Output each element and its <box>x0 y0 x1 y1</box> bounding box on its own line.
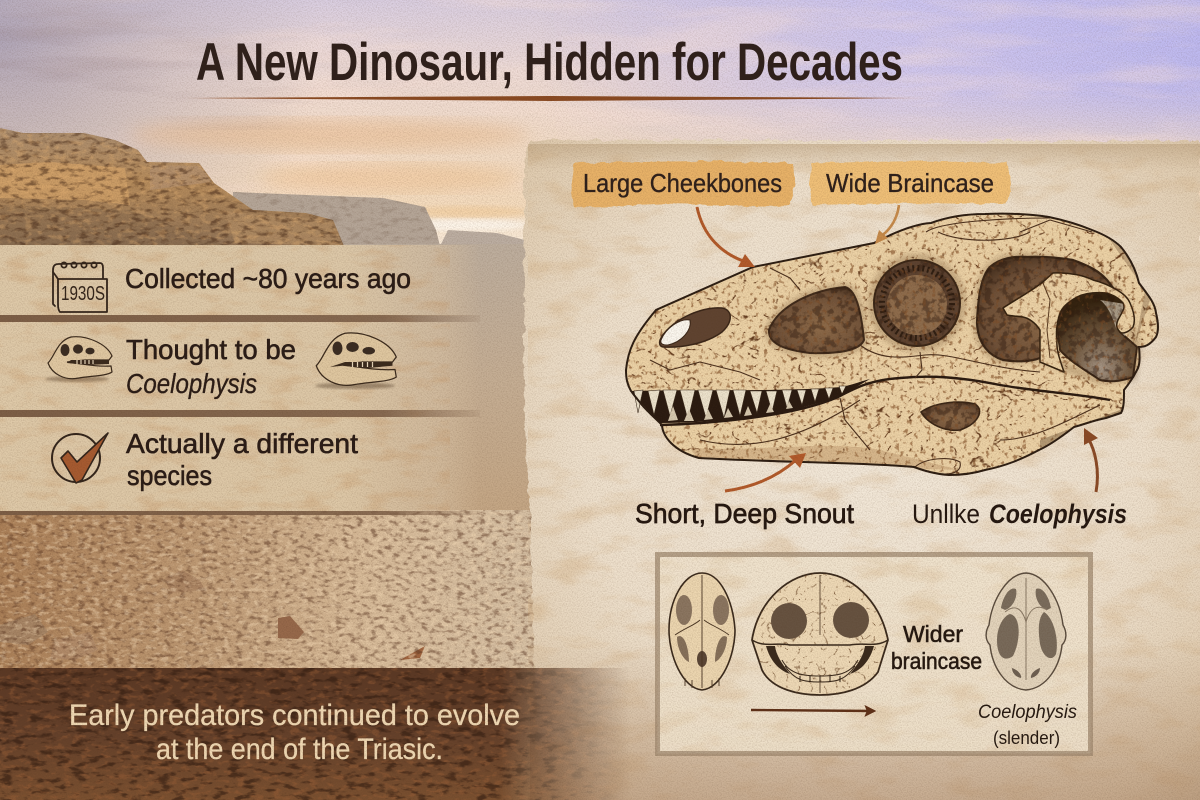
label: wide braincase: Wide Braincase <box>826 168 994 198</box>
caption: unlike Coelophysis: Coelophysis <box>989 499 1127 529</box>
text: species: species <box>127 460 212 491</box>
label: wide braincase <box>809 161 1011 205</box>
icon: calendar 1930s <box>53 262 107 312</box>
strip backgrounds <box>0 245 480 515</box>
fact: actually different <box>52 428 358 491</box>
cracks and sutures <box>650 218 1100 474</box>
footer text: Early predators continued to evolve <box>69 699 520 732</box>
fact: thought to be <box>45 333 396 399</box>
arrow: wider direction <box>751 710 873 711</box>
skull outline <box>626 214 1158 475</box>
text: Coelophysis slender: (slender) <box>993 727 1060 748</box>
arrow: to braincase <box>875 205 899 244</box>
antorbital opening <box>769 287 864 353</box>
icon: check mark <box>52 433 108 483</box>
fact: collected <box>53 262 411 312</box>
text: collected: Collected ~80 years ago <box>125 263 411 294</box>
nostril <box>660 308 730 347</box>
text: wider braincase: Wider <box>903 621 963 647</box>
skull: wide front view <box>750 570 890 698</box>
skull illustration <box>620 210 1165 480</box>
skull: slender Coelophysis <box>986 573 1066 690</box>
title: A New Dinosaur, Hidden for Decades <box>196 33 903 92</box>
arrow: to snout <box>725 453 806 491</box>
caption: unlike Coelophysis <box>912 499 1127 529</box>
text: Coelophysis: Coelophysis <box>126 368 257 399</box>
label: large cheekbones: Large Cheekbones <box>583 168 782 198</box>
text: thought to be: Thought to be <box>126 334 296 365</box>
text: actually a different: Actually a different <box>126 428 358 459</box>
mouth with teeth <box>631 379 870 423</box>
near cliff <box>0 128 350 248</box>
icon: calendar 1930s: 1930S <box>61 283 105 305</box>
label: large cheekbones <box>571 161 796 207</box>
arrow: to cheekbones <box>697 207 755 267</box>
footer text <box>69 699 520 766</box>
sky <box>0 0 1200 260</box>
title <box>175 33 932 101</box>
skull base <box>626 214 1158 475</box>
rocky foreground <box>0 510 534 670</box>
temporal opening rear <box>1057 292 1137 381</box>
text: Coelophysis slender <box>978 702 1077 748</box>
temporal opening front <box>977 257 1117 361</box>
title underline <box>175 96 932 101</box>
far mesas <box>232 192 524 244</box>
lower jaw line <box>660 377 1110 425</box>
socket texture <box>770 256 1136 430</box>
text: wider braincase <box>891 621 982 674</box>
mandibular opening <box>921 402 980 430</box>
arrow: to jaw <box>1084 428 1098 492</box>
panel: braincase comparison <box>658 554 1090 754</box>
panel: skull parchment <box>524 140 1200 800</box>
icon: small skull right <box>315 333 396 389</box>
text: Coelophysis slender: Coelophysis <box>978 702 1077 723</box>
ground <box>0 244 530 516</box>
footer band <box>0 668 640 800</box>
icon: small skull left <box>45 337 112 382</box>
caption: unlike Coelophysis: Unllke <box>912 499 980 529</box>
orbit <box>874 260 960 346</box>
footer text: at the end of the Triasic. <box>156 733 443 766</box>
panel: facts <box>0 245 480 515</box>
bone strut <box>1000 270 1140 375</box>
socket shadows <box>769 257 1137 380</box>
skull: narrow top view <box>669 573 735 690</box>
text: wider braincase: braincase <box>891 648 982 674</box>
caption: short deep snout: Short, Deep Snout <box>635 498 854 529</box>
